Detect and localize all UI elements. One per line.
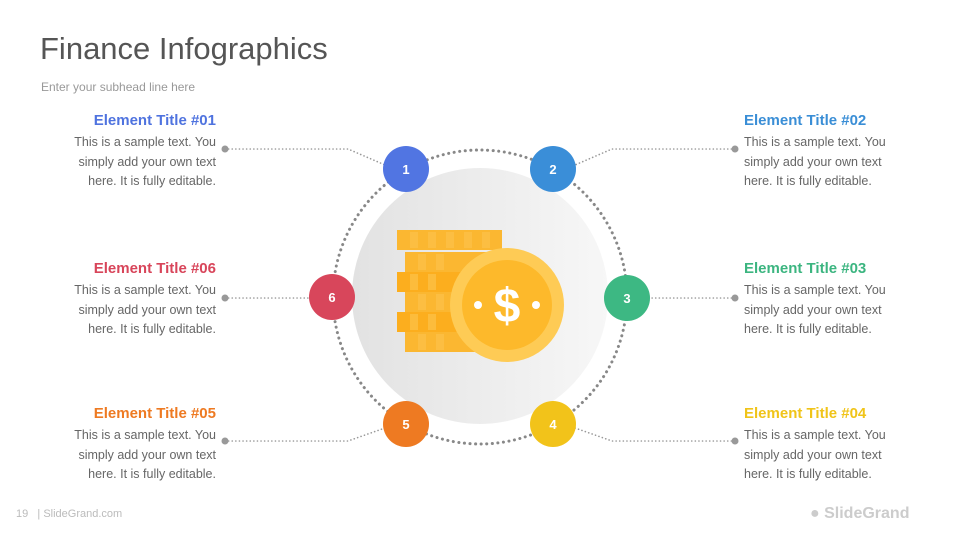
numbered nodes: 1	[402, 162, 410, 177]
text block 01	[74, 112, 216, 188]
text block 06: Element Title #06	[94, 260, 216, 277]
numbered nodes: 2	[549, 162, 557, 177]
text block 04	[744, 405, 886, 481]
icon: dollar coin: $	[494, 280, 521, 333]
numbered nodes: 3	[623, 291, 631, 306]
numbered nodes: 6	[328, 290, 336, 305]
text block 06	[74, 260, 216, 336]
text block 02: Element Title #02	[744, 112, 866, 129]
text block 01: This is a sample text. You simply add your own text here. It is fully editable.	[74, 135, 216, 188]
dotted ring	[333, 150, 627, 444]
subhead: Enter your subhead line here	[41, 80, 195, 94]
leader lines	[225, 149, 735, 441]
text block 05	[74, 405, 216, 481]
numbered nodes: 4	[549, 417, 557, 432]
leader end dots	[222, 146, 738, 444]
text block 03: This is a sample text. You simply add your own text here. It is fully editable.	[744, 283, 886, 336]
text block 01: Element Title #01	[94, 112, 216, 129]
text block 06: This is a sample text. You simply add your own text here. It is fully editable.	[74, 283, 216, 336]
text block 03	[744, 260, 886, 336]
numbered nodes	[309, 146, 650, 447]
text block 03: Element Title #03	[744, 260, 866, 277]
footer: 19 | SlideGrand.com	[16, 508, 122, 520]
text block 02	[744, 112, 886, 188]
text block 05: This is a sample text. You simply add your own text here. It is fully editable.	[74, 428, 216, 481]
text block 05: Element Title #05	[94, 405, 216, 422]
text block 04: Element Title #04	[744, 405, 866, 422]
text block 04: This is a sample text. You simply add your own text here. It is fully editable.	[744, 428, 886, 481]
logo: ● SlideGrand	[810, 505, 909, 522]
center gray circle	[352, 168, 608, 424]
icon: dollar coin	[450, 248, 564, 362]
numbered nodes: 5	[402, 417, 410, 432]
title: Finance Infographics	[40, 31, 328, 66]
icon: coin stack	[397, 230, 505, 352]
text block 02: This is a sample text. You simply add your own text here. It is fully editable.	[744, 135, 886, 188]
